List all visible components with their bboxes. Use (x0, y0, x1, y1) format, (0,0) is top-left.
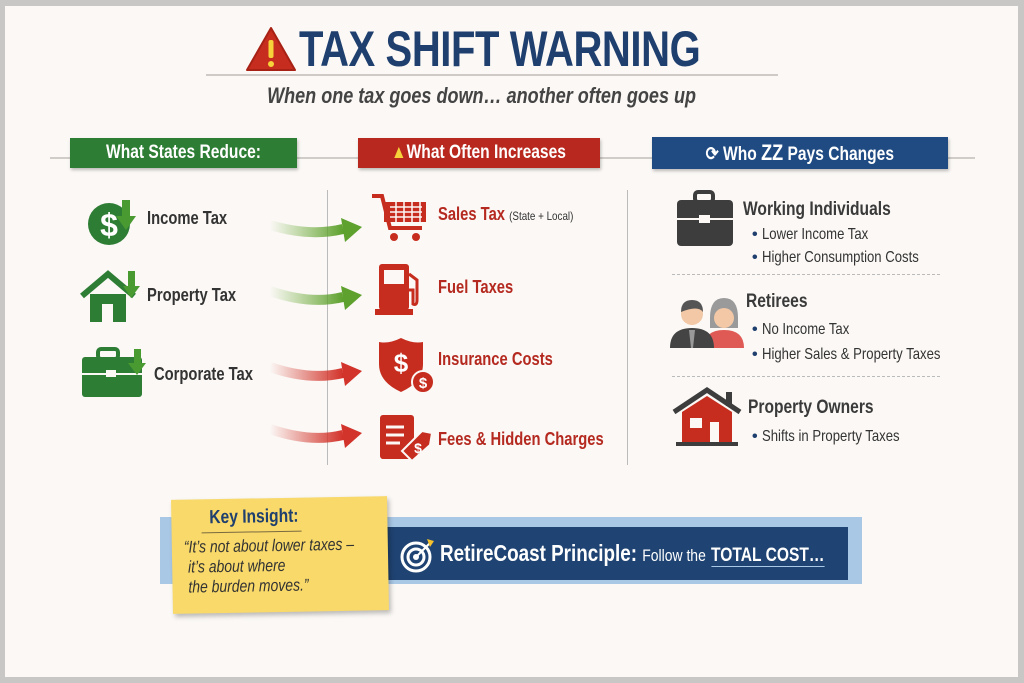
header: what often increases: ▲What Often Increases (392, 142, 566, 163)
item: insurance costs: $ (419, 375, 428, 392)
item: insurance costs (379, 338, 553, 392)
callout: key insight note: “It’s not about lower taxes – (184, 535, 354, 557)
callout: key insight note: Key Insight: (209, 506, 299, 528)
group: retirees: No Income Tax (762, 321, 849, 338)
item: property tax (80, 270, 236, 322)
item: fees & hidden charges (380, 415, 604, 460)
item: income tax (88, 200, 227, 245)
principle banner (160, 517, 862, 584)
item: income tax: Income Tax (147, 208, 227, 228)
item: corporate tax: Corporate Tax (154, 364, 253, 384)
item: fees & hidden charges: $ (414, 440, 422, 456)
header: what states reduce: What States Reduce: (106, 142, 261, 163)
arrow 3 (270, 362, 362, 386)
item: insurance costs: $ (394, 348, 409, 378)
header: who pays changes: ⟳ Who ZZ Pays Changes (706, 140, 894, 165)
arrow 1 (270, 218, 362, 242)
callout: key insight note: the burden moves.” (188, 576, 309, 597)
group: property owners: Property Owners (748, 397, 874, 418)
arrows (273, 218, 362, 448)
group: property owners: Shifts in Property Taxes (762, 428, 900, 445)
header: who pays changes (652, 137, 948, 169)
group: working individuals: Working Individuals (743, 199, 891, 220)
item: sales tax (372, 194, 573, 241)
icon: target (400, 539, 434, 572)
item: property tax: Property Tax (147, 285, 236, 305)
callout: key insight note: it’s about where (188, 556, 286, 577)
item: income tax: $ (100, 207, 118, 243)
item: fuel taxes (375, 264, 513, 315)
item: fees & hidden charges: Fees & Hidden Charges (438, 429, 604, 449)
item: insurance costs: Insurance Costs (438, 349, 553, 369)
item: sales tax: Sales Tax (State + Local) (438, 204, 573, 224)
arrow 4 (270, 424, 362, 448)
dividers (327, 190, 328, 465)
group: retirees (670, 291, 940, 363)
principle banner: RetireCoast Principle: Follow the TOTAL COST… (440, 540, 824, 566)
subtitle: When one tax goes down… another often goes up (267, 83, 696, 108)
group: working individuals: Higher Consumption Costs (762, 249, 919, 266)
icon: warning triangle (246, 27, 296, 71)
title: TAX SHIFT WARNING (299, 21, 700, 77)
header: what states reduce (70, 138, 297, 168)
group: working individuals: Lower Income Tax (762, 226, 868, 243)
group: retirees: Retirees (746, 291, 808, 312)
group: working individuals (677, 190, 919, 266)
group: retirees: Higher Sales & Property Taxes (762, 346, 940, 363)
callout: key insight note (171, 496, 389, 614)
item: fuel taxes: Fuel Taxes (438, 277, 513, 297)
header: what often increases (358, 138, 600, 168)
arrow 2 (270, 286, 362, 310)
group: property owners (672, 387, 900, 446)
item: corporate tax (82, 347, 253, 397)
